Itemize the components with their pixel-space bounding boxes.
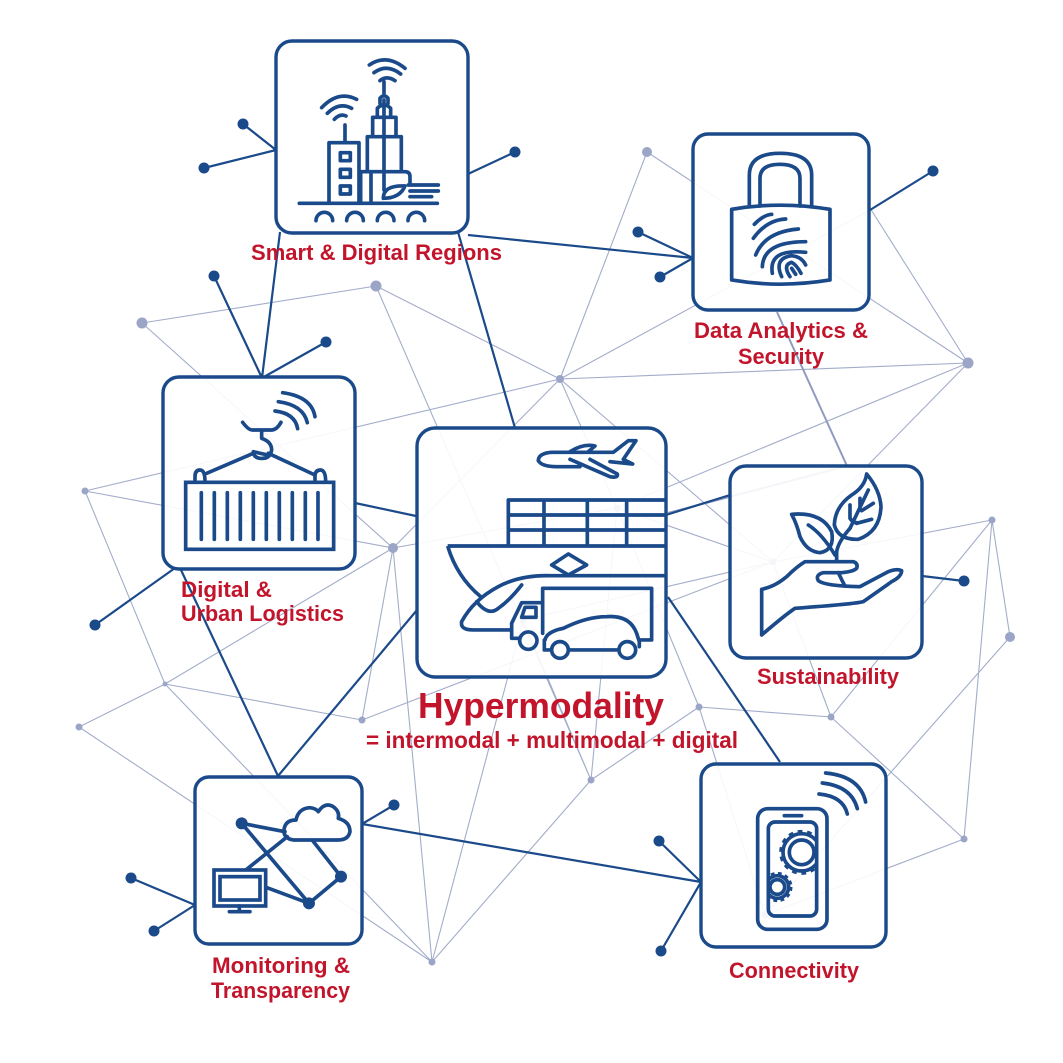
label: Smart & Digital Regions: Smart & Digital Regions xyxy=(251,240,502,265)
panel: Smart & Digital Regions xyxy=(251,41,502,265)
icon: padlock with fingerprint xyxy=(732,153,830,284)
icon: smartphone with gears xyxy=(758,773,866,929)
panel: Hypermodality xyxy=(366,428,738,753)
panel: Data Analytics & Security xyxy=(693,134,869,369)
icon: crane container xyxy=(186,393,334,549)
label: Data Analytics & Security: Data Analytics & xyxy=(694,318,868,343)
heading: Hypermodality: Hypermodality xyxy=(418,685,664,726)
icon: transport modes xyxy=(448,441,665,658)
label: Monitoring & Transparency: Transparency xyxy=(211,978,351,1003)
panel: Sustainability xyxy=(730,466,922,689)
label: Monitoring & Transparency: Monitoring & xyxy=(212,953,350,978)
subtitle: = intermodal + multimodal + digital xyxy=(366,727,738,753)
label: Data Analytics & Security: Security xyxy=(738,344,825,369)
panel: Digital & Urban Logistics xyxy=(163,377,355,626)
panel: Monitoring & Transparency xyxy=(195,777,362,1003)
background network xyxy=(76,147,1015,966)
label: Sustainability: Sustainability xyxy=(757,664,900,689)
label: Monitoring & Transparency xyxy=(211,953,351,1003)
label: Digital & Urban Logistics: Urban Logistics xyxy=(181,601,344,626)
icon: cloud network xyxy=(214,805,350,912)
label: Connectivity: Connectivity xyxy=(729,958,860,983)
dark connector lines xyxy=(90,118,970,956)
icon: hand with plant xyxy=(762,474,902,635)
label: Digital & Urban Logistics xyxy=(181,577,344,626)
panel: Connectivity xyxy=(701,764,886,983)
label: Data Analytics & Security xyxy=(694,318,868,369)
icon: smart city xyxy=(299,60,438,221)
label: Digital & Urban Logistics: Digital & xyxy=(181,577,272,602)
